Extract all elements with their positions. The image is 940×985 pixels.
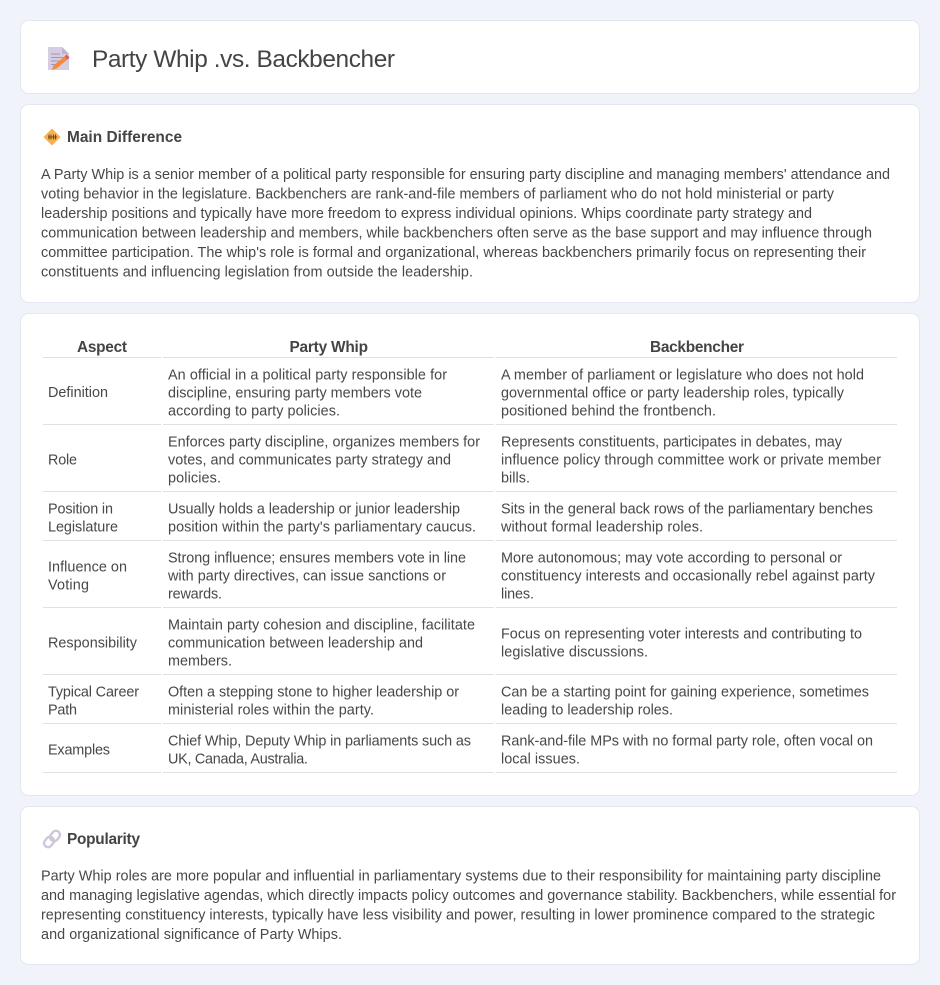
icon: warning diamond: [44, 128, 60, 146]
table header row: Party Whip: [290, 339, 368, 356]
table row: role: Role: [48, 452, 77, 468]
text block: popularity paragraph: [41, 868, 896, 943]
table row: role: bills.: [501, 470, 530, 486]
table row: examples: Examples: [48, 742, 110, 758]
table row: role: influence policy through committee work or private member: [501, 452, 881, 468]
text block: main difference paragraph: voting behavior in the legislature. Backbenchers are rank-and-file members of parliament who do not hold ministerial or party: [41, 186, 835, 202]
table row: typical career path: leading to leadership roles.: [501, 702, 673, 718]
panel: header: [20, 20, 920, 94]
table row: position in legislature: without formal leadership roles.: [500, 519, 703, 535]
panel: popularity: [20, 806, 920, 964]
table row: influence on voting: [43, 550, 897, 608]
table header row: Aspect: [77, 339, 127, 356]
table row: influence on voting: Strong influence; ensures members vote in line: [168, 550, 466, 566]
text block: main difference paragraph: A Party Whip is a senior member of a political party responsible for ensuring party discipline and managing members' attendance and: [41, 167, 890, 183]
table row: definition: discipline, ensuring party members vote: [168, 385, 422, 401]
table row: responsibility: [43, 617, 897, 675]
text block: popularity paragraph: Party Whip roles are more popular and influential in parliamentary systems due to their responsibility for maintaining party discipline: [41, 868, 881, 884]
table row: influence on voting: rewards.: [168, 586, 222, 602]
table row: definition: governmental office or party leadership roles, typically: [501, 385, 845, 401]
table row: examples: Rank-and-file MPs with no formal party role, often vocal on: [501, 733, 873, 749]
text block: main difference paragraph: communication between leadership and members, while backbenchers often serve as the base support and may influence through: [41, 226, 872, 242]
table row: examples: local issues.: [501, 751, 580, 767]
table row: typical career path: Often a stepping stone to higher leadership or: [168, 684, 459, 700]
table row: definition: An official in a political party responsible for: [168, 367, 447, 383]
table row: role: votes, and communicates party strategy and: [168, 452, 451, 468]
table row: typical career path: Path: [48, 702, 77, 718]
text block: main difference paragraph: constituents and influencing legislation from outside the leadership.: [41, 264, 473, 280]
title: Party Whip .vs. Backbencher: [92, 46, 395, 73]
table row: influence on voting: Influence on: [48, 559, 127, 575]
text block: popularity paragraph: and managing legislative agendas, which directly impacts policy outcomes and governance stability. Backbenchers, while essential for: [41, 888, 896, 904]
text block: main difference paragraph: committee participation. The whip's role is formal and organizational, whereas backbenchers primarily focus on representing their: [41, 245, 866, 261]
table row: responsibility: members.: [168, 653, 232, 669]
icon: document with pencil: [48, 47, 70, 70]
table row: definition: Definition: [48, 385, 108, 401]
table header row: Backbencher: [650, 339, 744, 356]
table row: definition: according to party policies.: [168, 403, 340, 419]
heading: popularity: Popularity: [67, 831, 140, 848]
table row: responsibility: Maintain party cohesion and discipline, facilitate: [168, 617, 475, 633]
table row: definition: [43, 367, 897, 425]
panel: comparison table: [20, 314, 920, 796]
table row: typical career path: Typical Career: [48, 684, 139, 700]
table row: influence on voting: constituency interests and occasionally rebel against party: [501, 568, 876, 584]
heading: main difference: Main Difference: [67, 129, 182, 146]
table row: responsibility: legislative discussions.: [501, 644, 648, 660]
table row: position in legislature: Usually holds a leadership or junior leadership: [168, 501, 460, 517]
table row: typical career path: Can be a starting point for gaining experience, sometimes: [501, 684, 869, 700]
table row: typical career path: ministerial roles within the party.: [168, 702, 374, 718]
table row: position in legislature: [43, 501, 897, 541]
table row: position in legislature: Legislature: [48, 519, 118, 535]
panel: main difference: [20, 104, 920, 302]
text block: popularity paragraph: representing constituency interests, typically have less visibility and power, resulting in lower prominence compared to the strategic: [41, 908, 875, 924]
table row: position in legislature: position within the party's parliamentary caucus.: [168, 519, 476, 535]
table row: influence on voting: Voting: [48, 577, 89, 593]
icon: link: [42, 829, 62, 849]
table row: examples: [43, 733, 897, 773]
table row: influence on voting: lines.: [501, 586, 534, 602]
table row: position in legislature: Position in: [48, 501, 113, 517]
table row: examples: Chief Whip, Deputy Whip in parliaments such as: [168, 733, 471, 749]
table row: definition: A member of parliament or legislature who does not hold: [501, 367, 864, 383]
table row: typical career path: [43, 684, 897, 724]
table row: influence on voting: More autonomous; may vote according to personal or: [501, 550, 842, 566]
table header row: [43, 339, 897, 358]
table row: responsibility: communication between leadership and: [168, 635, 423, 651]
text block: popularity paragraph: and organizational significance of Party Whips.: [41, 927, 342, 943]
table row: position in legislature: Sits in the general back rows of the parliamentary benches: [501, 501, 873, 517]
table row: responsibility: Responsibility: [48, 635, 138, 651]
table row: role: [43, 434, 897, 492]
table row: role: Enforces party discipline, organizes members for: [168, 434, 480, 450]
table row: role: Represents constituents, participates in debates, may: [501, 434, 843, 450]
table row: role: policies.: [168, 470, 221, 486]
table row: definition: positioned behind the frontbench.: [501, 403, 716, 419]
table row: influence on voting: with party directives, can issue sanctions or: [167, 568, 446, 584]
table row: examples: UK, Canada, Australia.: [168, 751, 308, 767]
text block: main difference paragraph: [41, 167, 890, 280]
table row: responsibility: Focus on representing voter interests and contributing to: [501, 626, 862, 642]
text block: main difference paragraph: leadership positions and typically have more freedom to express individual opinions. Whips coordinate party strategy and: [41, 206, 812, 222]
